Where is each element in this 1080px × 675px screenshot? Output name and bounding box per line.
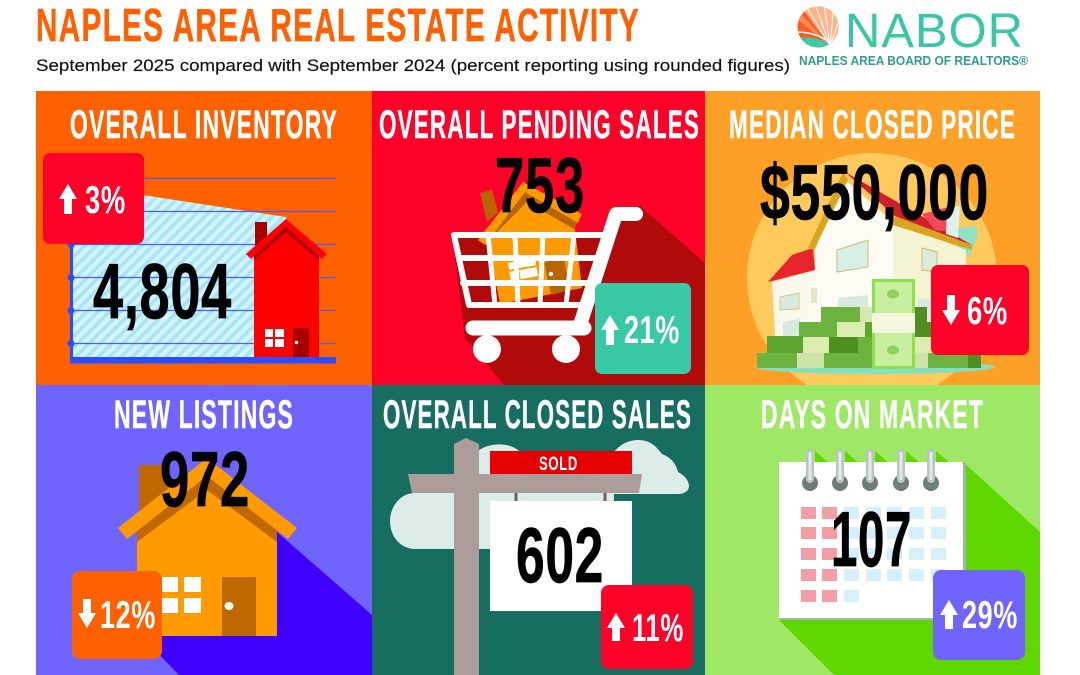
- icon: shopping cart: [454, 214, 636, 363]
- panel: overall inventory: [36, 91, 372, 385]
- sold rider: [490, 451, 632, 475]
- icon: orange house: [118, 458, 297, 636]
- badge: down 12%: 12%: [100, 594, 156, 637]
- icon: calendar: [779, 449, 966, 620]
- badge: down 6%: 6%: [967, 290, 1008, 333]
- badge: up 3%: [43, 153, 144, 244]
- title: NAPLES AREA REAL ESTATE ACTIVITY: [36, 0, 640, 51]
- heading: OVERALL CLOSED SALES: [383, 393, 692, 437]
- sign board: [490, 501, 632, 611]
- sign hooks: [516, 493, 605, 501]
- icon: shell: [798, 6, 838, 48]
- badge: up 29%: 29%: [962, 594, 1018, 637]
- panel: days on market: [705, 385, 1040, 675]
- dollar bill: [872, 279, 915, 369]
- sign post: [408, 438, 642, 675]
- panel: median closed price: [705, 91, 1040, 403]
- icon: house and money: [755, 172, 995, 374]
- sold rider: SOLD: [539, 453, 578, 475]
- badge: up 29%: [933, 570, 1025, 660]
- icon: orange house: [478, 182, 582, 304]
- value: 4,804: [93, 247, 232, 335]
- badge: up 11%: [601, 585, 693, 669]
- logo wordmark: NABOR: [845, 5, 1024, 58]
- clouds: [390, 440, 689, 549]
- heading: NEW LISTINGS: [114, 393, 294, 437]
- value: 602: [516, 511, 604, 599]
- area chart: [68, 178, 336, 364]
- badge: down 12%: [72, 571, 162, 659]
- panel: new listings: [36, 385, 372, 675]
- logo: NABOR: [796, 4, 1029, 68]
- badge: up 21%: 21%: [624, 309, 680, 352]
- calendar shadow: [779, 462, 1040, 675]
- sun circle: [747, 153, 997, 403]
- house shadow: [150, 532, 372, 675]
- icon: red house: [246, 219, 327, 357]
- heading: OVERALL INVENTORY: [70, 103, 338, 147]
- value: 753: [495, 141, 585, 229]
- badge: down 6%: [931, 265, 1029, 355]
- logo tagline: NAPLES AREA BOARD OF REALTORS®: [799, 54, 1029, 68]
- cart shadow: [452, 206, 705, 385]
- badge: up 11%: 11%: [632, 607, 684, 650]
- subtitle: September 2025 compared with September 2024 (percent reporting using rounded figures): [36, 57, 790, 75]
- panel: overall pending sales: [372, 91, 705, 385]
- badge: up 21%: [595, 283, 691, 374]
- value: 972: [160, 435, 250, 523]
- value: 107: [831, 495, 912, 583]
- money stacks: [757, 307, 981, 368]
- heading: OVERALL PENDING SALES: [379, 103, 700, 147]
- badge: up 3%: 3%: [85, 179, 126, 222]
- panel: overall closed sales: [372, 385, 705, 675]
